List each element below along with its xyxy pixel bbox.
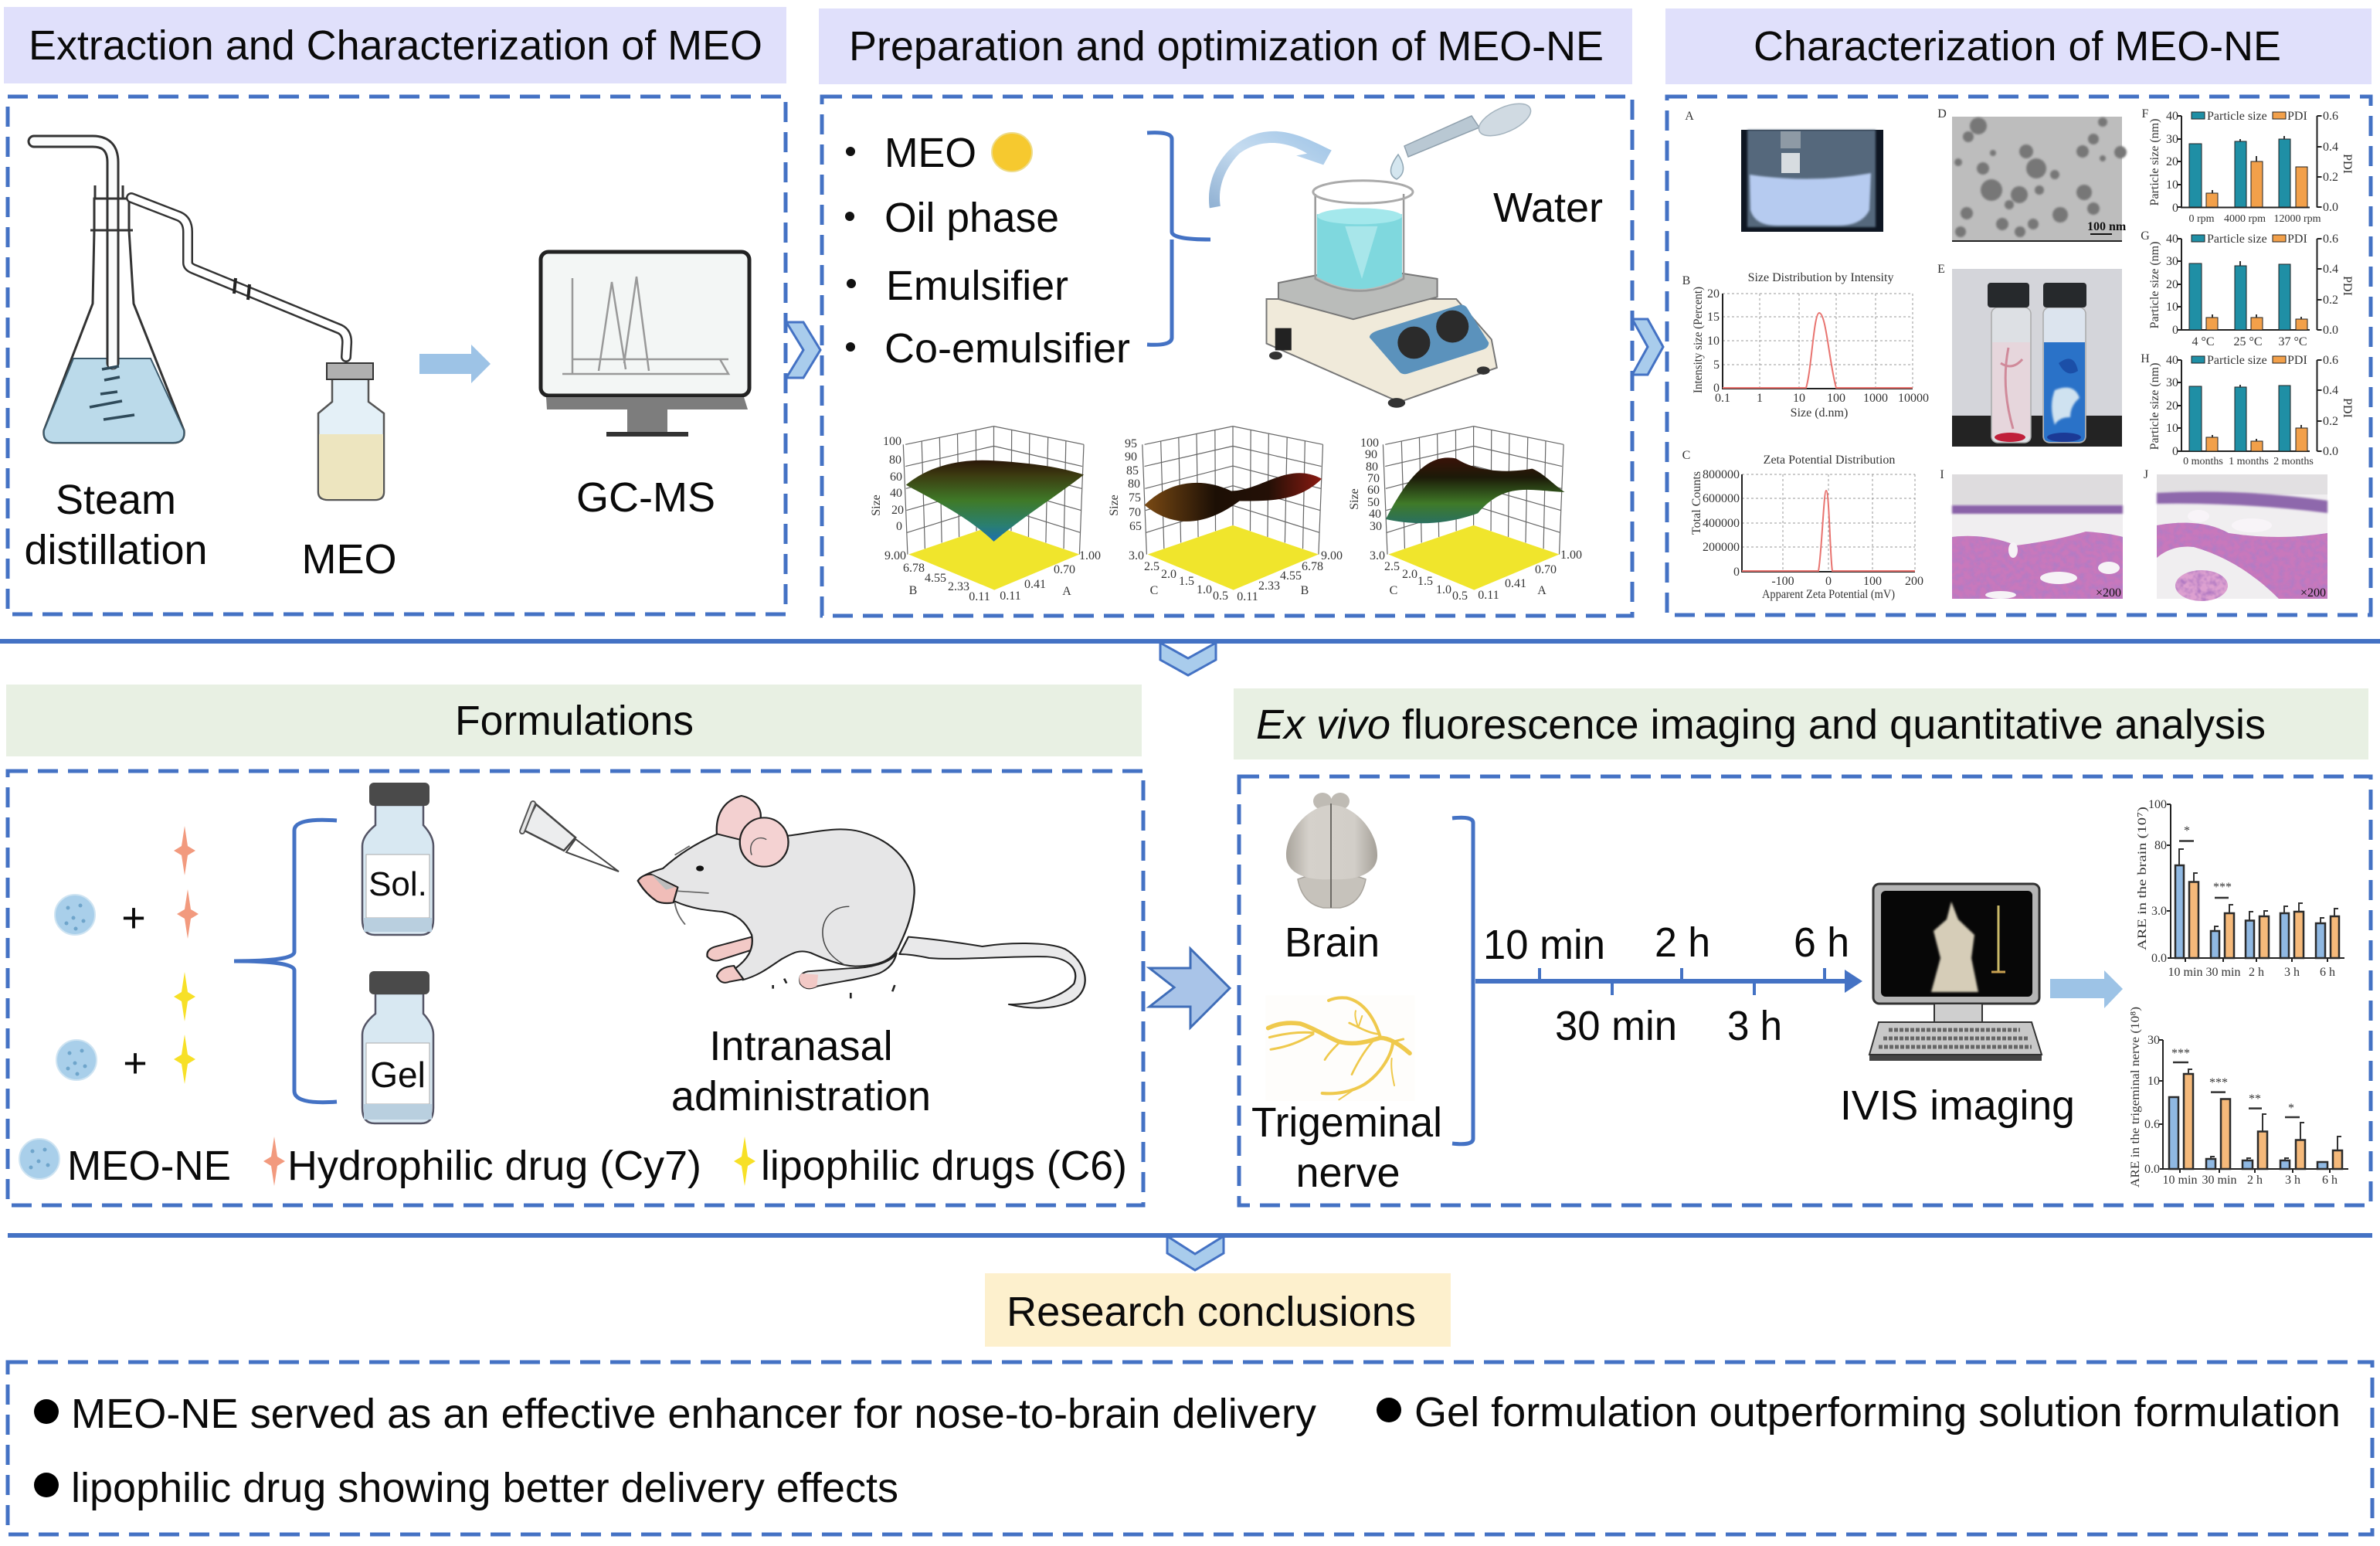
- icon: pipette: [1390, 97, 1535, 179]
- chart H: particle size by storage time: 1 months: [2229, 456, 2269, 467]
- chart H: particle size by storage time: 0.6: [2323, 354, 2338, 367]
- chart G: particle size by temperature: 0.2: [2323, 294, 2338, 307]
- panel letters: B: [1682, 274, 1690, 287]
- chart F: particle size by rpm: PDI: [2341, 154, 2354, 174]
- photo J: histology: [2157, 474, 2327, 601]
- chart B: size distribution: Size Distribution by Intensity: [1748, 271, 1893, 284]
- chart: response surface 1: 1.00: [1079, 549, 1101, 562]
- heading: ex vivo imaging: Ex vivo: [1256, 702, 1390, 748]
- chart: response surface 2: 2.0: [1161, 568, 1176, 581]
- panel letters: D: [1937, 107, 1947, 121]
- chart: response surface 2: 70: [1129, 506, 1141, 519]
- chart: response surface 1: 0.11: [1000, 590, 1021, 603]
- heading: extraction: [4, 7, 786, 83]
- chart: ARE in the brain: 80: [2154, 839, 2167, 852]
- conclusion 1: MEO-NE served as an effective enhancer for nose-to-brain delivery: [71, 1391, 1316, 1437]
- chart: ARE in the trigeminal nerve: 10 min: [2163, 1174, 2197, 1187]
- frame: conclusions: [8, 1362, 2372, 1534]
- chart H: particle size by storage time: 0 months: [2183, 456, 2223, 467]
- timeline labels: 2 h: [1655, 919, 1710, 966]
- conclusion 3: lipophilic drug showing better delivery effects: [71, 1465, 898, 1511]
- chart: response surface 2: 2.33: [1258, 579, 1280, 593]
- photo E: two vials: [1952, 269, 2122, 447]
- panel letters: I: [1940, 468, 1944, 481]
- panel: characterization of MEO-NE: [1665, 8, 2372, 615]
- chart G: particle size by temperature: 20: [2166, 278, 2178, 291]
- chart F: particle size by rpm: Particle size: [2207, 110, 2267, 123]
- chart: response surface 3: 2.5: [1384, 560, 1400, 573]
- frame: ex vivo panel: [1239, 776, 2371, 1205]
- chart C: zeta potential: 100: [1863, 575, 1882, 588]
- conclusion 2: Gel formulation outperforming solution formulation: [1414, 1389, 2341, 1436]
- chart G: particle size by temperature: Particle size (nm): [2148, 242, 2161, 328]
- chart: response surface 1: 0.11: [969, 590, 990, 603]
- chart B: size distribution: 1: [1757, 392, 1763, 405]
- chart: response surface 2: 75: [1129, 491, 1141, 505]
- icon: MEO oil drop: [992, 133, 1032, 172]
- chart B: size distribution: 5: [1713, 358, 1720, 372]
- list: ingredients: MEO: [884, 130, 976, 176]
- chart C: zeta potential: 200: [1905, 575, 1923, 588]
- chart: ARE in the trigeminal nerve: [2129, 1007, 2348, 1188]
- chart B: size distribution: 0.1: [1715, 392, 1730, 405]
- chart: response surface 3: Size: [1348, 488, 1361, 510]
- chart: response surface 1: 0.70: [1054, 563, 1075, 576]
- chart C: zeta potential: 200000: [1703, 541, 1740, 554]
- chart H: particle size by storage time: 0: [2172, 445, 2178, 458]
- panel letters: G: [2141, 229, 2150, 243]
- arrow: chevron down to formulations: [1160, 643, 1216, 675]
- chart: response surface 2: 9.00: [1321, 549, 1343, 562]
- heading: ex vivo imaging: fluorescence imaging and quantitative analysis: [1402, 702, 2266, 748]
- chart: response surface 3: 90: [1365, 448, 1377, 461]
- divider: upper section separator: [0, 639, 2380, 644]
- chart G: particle size by temperature: 0: [2172, 324, 2178, 337]
- chart G: particle size by temperature: 37 °C: [2278, 335, 2307, 348]
- chart B: size distribution: [1692, 271, 1929, 420]
- chart: response surface 3: 0.70: [1535, 563, 1557, 576]
- chart G: particle size by temperature: 40: [2166, 233, 2178, 246]
- panel letters: C: [1682, 449, 1690, 462]
- chart C: zeta potential: 800000: [1703, 468, 1740, 481]
- panel letters: J: [2144, 468, 2148, 481]
- chart: response surface 1: 4.55: [925, 572, 946, 585]
- chart: response surface 3: 100: [1360, 437, 1379, 450]
- chart F: particle size by rpm: 30: [2166, 133, 2178, 146]
- chart G: particle size by temperature: 25 °C: [2233, 335, 2263, 348]
- chart G: particle size by temperature: 10: [2166, 301, 2178, 314]
- panel: research conclusions: [8, 1273, 2372, 1534]
- label: steam distillation: distillation: [24, 527, 208, 573]
- chart: response surface 2: B: [1301, 584, 1309, 597]
- bracket: ingredients: [1147, 133, 1210, 345]
- heading: characterization: Characterization of MEO-NE: [1754, 23, 2281, 70]
- bracket: formulations: [234, 820, 337, 1103]
- icon: GC-MS monitor: [541, 252, 749, 437]
- chart: response surface 3: 0.5: [1452, 590, 1468, 603]
- label: steam distillation: [24, 477, 208, 573]
- chart: ARE in the trigeminal nerve: 0.6: [2144, 1118, 2160, 1131]
- photo I: histology: [1952, 474, 2123, 600]
- icon: magnetic stirrer with beaker: [1267, 181, 1497, 408]
- chart F: particle size by rpm: Particle size (nm): [2148, 119, 2161, 206]
- chart H: particle size by storage time: 10: [2166, 422, 2178, 435]
- chart: response surface 2: 0.5: [1213, 590, 1228, 603]
- chart: response surface 2: 1.5: [1179, 575, 1194, 588]
- chart: ARE in the trigeminal nerve: 10: [2147, 1075, 2160, 1088]
- chart: response surface 3: 60: [1367, 484, 1380, 497]
- chart: response surface 2: [1108, 426, 1343, 603]
- heading: preparation: [819, 8, 1632, 84]
- chart: response surface 1: A: [1062, 585, 1071, 598]
- chart H: particle size by storage time: Particle size (nm): [2148, 363, 2161, 450]
- chart C: zeta potential: Zeta Potential Distribution: [1764, 454, 1895, 467]
- chart F: particle size by rpm: 10: [2166, 178, 2178, 192]
- chart: response surface 3: A: [1537, 584, 1546, 597]
- legend: hydrophilic drug: Hydrophilic drug (Cy7): [287, 1143, 701, 1189]
- chart: response surface 2: Size: [1108, 494, 1121, 516]
- chart F: particle size by rpm: 0 rpm: [2188, 213, 2215, 225]
- timeline labels: 30 min: [1555, 1003, 1677, 1049]
- heading: extraction: Extraction and Characterization of MEO: [29, 22, 762, 69]
- chart: response surface 1: 9.00: [884, 549, 906, 562]
- chart: response surface 1: 80: [889, 454, 901, 467]
- label: trigeminal nerve: [1251, 1099, 1442, 1196]
- arrow: chevron extraction to preparation: [786, 322, 820, 378]
- icon: MEO-NE droplet with lipophilic drug: [56, 972, 195, 1086]
- chart: ARE in the brain: 3.0: [2151, 905, 2167, 918]
- chart: response surface 2: 3.0: [1129, 549, 1144, 562]
- chart H: particle size by storage time: 0.2: [2323, 415, 2338, 428]
- chart F: particle size by rpm: 0.4: [2323, 141, 2338, 154]
- label: intranasal administration: administration: [671, 1073, 931, 1120]
- label: steam distillation: Steam: [56, 477, 176, 523]
- chart: response surface 2: 80: [1128, 477, 1140, 491]
- label: GC-MS: GC-MS: [576, 474, 715, 521]
- chart: response surface 2: 2.5: [1144, 560, 1159, 573]
- chart: response surface 2: 95: [1125, 437, 1137, 450]
- heading: research conclusions: Research conclusions: [1007, 1289, 1416, 1335]
- icon: trigeminal nerve: [1265, 995, 1415, 1101]
- chart: response surface 1: 2.33: [948, 580, 969, 593]
- legend: MEO-NE: MEO-NE: [67, 1143, 231, 1189]
- timeline labels: 10 min: [1483, 922, 1605, 968]
- label: intranasal administration: [671, 1023, 931, 1120]
- chart H: particle size by storage time: 30: [2166, 376, 2178, 389]
- chart: response surface 3: 50: [1367, 496, 1380, 509]
- chart B: size distribution: 10000: [1898, 392, 1929, 405]
- frame: extraction panel: [8, 97, 786, 614]
- frame: characterization panel: [1667, 97, 2371, 615]
- chart: response surface 1: 60: [890, 471, 902, 484]
- chart G: particle size by temperature: 0.6: [2323, 233, 2338, 246]
- photo A: emulsion beaker: [1741, 130, 1883, 232]
- frame: preparation panel: [822, 97, 1632, 616]
- chart F: particle size by rpm: [2148, 110, 2354, 225]
- arrow: formulations to ex vivo: [1149, 949, 1230, 1028]
- chart B: size distribution: 1000: [1863, 392, 1888, 405]
- chart: ARE in the trigeminal nerve: **: [2249, 1092, 2261, 1106]
- heading: formulations: Formulations: [455, 698, 694, 744]
- chart: response surface 1: 0: [896, 520, 902, 533]
- chart H: particle size by storage time: [2148, 354, 2354, 467]
- list: ingredients: Emulsifier: [886, 263, 1068, 309]
- timeline labels: 3 h: [1727, 1003, 1782, 1049]
- chart H: particle size by storage time: PDI: [2287, 354, 2307, 367]
- panel letters: H: [2141, 352, 2150, 365]
- chart: response surface 3: 1.0: [1436, 583, 1451, 596]
- timeline labels: [1483, 919, 1849, 1049]
- label: IVIS imaging: IVIS imaging: [1840, 1082, 2075, 1129]
- chart H: particle size by storage time: 0.0: [2323, 445, 2338, 458]
- chart: response surface 1: [870, 426, 1101, 603]
- chart G: particle size by temperature: 0.4: [2323, 263, 2338, 276]
- chart: ARE in the brain: 6 h: [2320, 966, 2335, 979]
- chart H: particle size by storage time: 0.4: [2323, 384, 2338, 397]
- panel: preparation and optimization: [819, 8, 1632, 616]
- chart F: particle size by rpm: 0: [2172, 202, 2178, 215]
- heading: characterization: [1665, 8, 2372, 84]
- chart: response surface 1: Size: [870, 494, 883, 516]
- panel letters: E: [1937, 263, 1945, 276]
- chart: ARE in the brain: 0.0: [2151, 952, 2167, 965]
- chart: response surface 1: 6.78: [903, 562, 925, 575]
- photo I: histology: ×200: [2096, 586, 2121, 600]
- chart: response surface 3: 80: [1366, 460, 1378, 474]
- heading: ex vivo imaging: [1234, 688, 2368, 759]
- chart G: particle size by temperature: PDI: [2287, 233, 2307, 246]
- chart F: particle size by rpm: 12000 rpm: [2273, 213, 2321, 225]
- chart: response surface 2: 85: [1126, 464, 1139, 477]
- chart: ARE in the brain: [2136, 798, 2344, 979]
- arrow: chevron preparation to characterization: [1632, 319, 1663, 375]
- icon: gel vial: Gel: [370, 1055, 426, 1095]
- chart C: zeta potential: Total Counts: [1690, 471, 1703, 535]
- chart: ARE in the brain: ***: [2213, 881, 2232, 894]
- legend: lipophilic drugs: lipophilic drugs (C6): [761, 1143, 1127, 1189]
- chart C: zeta potential: Apparent Zeta Potential (mV): [1762, 588, 1895, 601]
- icon: IVIS computer: [1869, 884, 2042, 1061]
- label: MEO: MEO: [301, 536, 397, 583]
- chart C: zeta potential: 400000: [1703, 517, 1740, 530]
- chart: response surface 3: 1.5: [1417, 575, 1433, 588]
- illustration: mouse: [638, 796, 1085, 1008]
- icon: solution vial: [362, 783, 433, 935]
- chart: response surface 3: 0.41: [1505, 577, 1526, 590]
- chart F: particle size by rpm: 0.6: [2323, 110, 2338, 123]
- chart H: particle size by storage time: Particle size: [2207, 354, 2267, 367]
- chart C: zeta potential: -100: [1771, 575, 1794, 588]
- panel letters: [1682, 107, 2150, 481]
- chart: response surface 3: 40: [1369, 508, 1381, 521]
- chart C: zeta potential: 0: [1733, 566, 1740, 579]
- chart C: zeta potential: 0: [1825, 575, 1832, 588]
- chart: ARE in the trigeminal nerve: ARE in the trigeminal nerve (10⁸): [2129, 1007, 2142, 1188]
- heading: research conclusions: [985, 1273, 1451, 1347]
- heading: formulations: [6, 685, 1142, 756]
- chart: ARE in the brain: ARE in the brain (10⁷): [2136, 807, 2149, 950]
- chart: response surface 2: C: [1150, 584, 1158, 597]
- icon: MEO vial: [318, 363, 384, 500]
- arrow: to quantification: [2050, 970, 2123, 1008]
- chart: response surface 1: 20: [891, 504, 904, 517]
- chart: response surface 2: 6.78: [1302, 560, 1323, 573]
- icon: MEO-NE droplet with hydrophilic drug: +: [121, 895, 146, 941]
- chart: response surface 2: 1.0: [1197, 583, 1212, 596]
- chart H: particle size by storage time: 40: [2166, 354, 2178, 367]
- chart: ARE in the brain: 10 min: [2168, 966, 2202, 979]
- chart B: size distribution: 15: [1707, 311, 1720, 324]
- chart: ARE in the trigeminal nerve: *: [2288, 1102, 2294, 1115]
- chart: response surface 3: 70: [1367, 472, 1380, 485]
- chart: ARE in the brain: 100: [2148, 798, 2167, 811]
- chart: response surface 2: 4.55: [1280, 569, 1302, 583]
- timeline labels: 6 h: [1794, 919, 1849, 966]
- chart H: particle size by storage time: 20: [2166, 399, 2178, 413]
- arrow: to GC-MS: [419, 345, 491, 383]
- chart: ARE in the brain: 2 h: [2249, 966, 2264, 979]
- icon: distillation flask: [34, 141, 347, 443]
- chart: ARE in the trigeminal nerve: 2 h: [2247, 1174, 2263, 1187]
- timeline arrow: [1475, 968, 1862, 995]
- chart B: size distribution: 20: [1707, 287, 1720, 301]
- chart: response surface 1: 100: [883, 435, 901, 448]
- icon: brain: [1286, 793, 1377, 908]
- chart: ARE in the brain: 3 h: [2284, 966, 2300, 979]
- chart F: particle size by rpm: 0.0: [2323, 201, 2338, 214]
- frame: formulations panel: [8, 771, 1143, 1205]
- icon: solution vial: Sol.: [368, 865, 427, 903]
- heading: preparation: Preparation and optimization of MEO-NE: [849, 23, 1604, 70]
- chart: ARE in the trigeminal nerve: ***: [2209, 1076, 2228, 1089]
- chart: response surface 2: 0.11: [1237, 590, 1258, 603]
- chart F: particle size by rpm: 4000 rpm: [2224, 213, 2266, 225]
- chart G: particle size by temperature: PDI: [2341, 276, 2354, 296]
- panel letters: F: [2142, 107, 2149, 121]
- chart: response surface 2: 65: [1129, 520, 1142, 533]
- icon: MEO-NE droplet with lipophilic drug: +: [123, 1040, 148, 1086]
- list: ingredients: Co-emulsifier: [884, 325, 1130, 372]
- chart: response surface 3: C: [1390, 584, 1397, 597]
- chart B: size distribution: 100: [1827, 392, 1845, 405]
- list: ingredients: [845, 130, 1130, 372]
- chart: ARE in the brain: *: [2184, 824, 2190, 838]
- chart H: particle size by storage time: PDI: [2341, 398, 2354, 418]
- label: trigeminal nerve: nerve: [1295, 1150, 1400, 1196]
- chart G: particle size by temperature: 0.0: [2323, 324, 2338, 337]
- chart G: particle size by temperature: 4 °C: [2192, 335, 2215, 348]
- chart: response surface 1: B: [909, 584, 917, 597]
- chart: response surface 1: 40: [890, 487, 902, 500]
- chart: response surface 3: 2.0: [1402, 568, 1417, 581]
- chart F: particle size by rpm: 0.2: [2323, 171, 2338, 184]
- chart C: zeta potential: 600000: [1703, 492, 1740, 505]
- chart H: particle size by storage time: 2 months: [2273, 456, 2314, 467]
- panel letters: A: [1685, 110, 1694, 123]
- chart: response surface 3: 30: [1370, 520, 1382, 533]
- icon: MEO-NE droplet with hydrophilic drug: [55, 826, 199, 941]
- icon: pipette tip: [522, 804, 619, 872]
- chart G: particle size by temperature: Particle size: [2207, 233, 2267, 246]
- chart: ARE in the trigeminal nerve: 3 h: [2285, 1174, 2300, 1187]
- chart: ARE in the trigeminal nerve: 6 h: [2322, 1174, 2338, 1187]
- chart G: particle size by temperature: 30: [2166, 255, 2178, 268]
- chart: response surface 3: 3.0: [1370, 549, 1385, 562]
- icon: gel vial: [362, 971, 433, 1123]
- chart F: particle size by rpm: 20: [2166, 155, 2178, 168]
- chart: response surface 1: 0.41: [1024, 578, 1046, 591]
- panel: extraction and characterization of MEO: [4, 7, 786, 614]
- photo J: histology: ×200: [2300, 586, 2326, 600]
- chart B: size distribution: Intensity size (Percent): [1692, 287, 1705, 393]
- chart B: size distribution: Size (d.nm): [1791, 406, 1848, 420]
- chart: ARE in the trigeminal nerve: 30 min: [2202, 1174, 2236, 1187]
- chart F: particle size by rpm: 40: [2166, 110, 2178, 123]
- label: water: Water: [1493, 185, 1603, 231]
- arrow: chevron down to conclusions: [1167, 1236, 1224, 1270]
- label: intranasal administration: Intranasal: [709, 1023, 893, 1069]
- divider: lower section separator: [8, 1233, 2372, 1238]
- label: brain: Brain: [1285, 919, 1380, 966]
- bracket: tissues: [1452, 817, 1473, 1144]
- arrow: curved to beaker: [1209, 131, 1332, 208]
- photo D: TEM image: [1952, 117, 2127, 242]
- panel: formulations: [6, 685, 1143, 1205]
- chart: ARE in the trigeminal nerve: 30: [2147, 1034, 2160, 1047]
- chart: response surface 3: [1348, 426, 1582, 603]
- chart G: particle size by temperature: [2148, 233, 2354, 348]
- panel: ex vivo imaging: [1234, 688, 2371, 1205]
- chart: response surface 2: 90: [1125, 450, 1137, 464]
- chart: response surface 3: 0.11: [1478, 589, 1499, 602]
- list: ingredients: Oil phase: [884, 195, 1059, 241]
- chart F: particle size by rpm: PDI: [2287, 110, 2307, 123]
- chart: ARE in the brain: 30 min: [2206, 966, 2240, 979]
- chart B: size distribution: 10: [1707, 335, 1720, 348]
- chart: ARE in the trigeminal nerve: 0.0: [2144, 1163, 2160, 1176]
- chart C: zeta potential: [1690, 454, 1923, 601]
- chart: response surface 3: 1.00: [1560, 549, 1582, 562]
- label: trigeminal nerve: Trigeminal: [1251, 1099, 1442, 1146]
- photo D: TEM image: 100 nm: [2087, 220, 2127, 233]
- chart: ARE in the trigeminal nerve: ***: [2171, 1047, 2190, 1060]
- chart B: size distribution: 0: [1713, 382, 1720, 395]
- chart B: size distribution: 10: [1793, 392, 1805, 405]
